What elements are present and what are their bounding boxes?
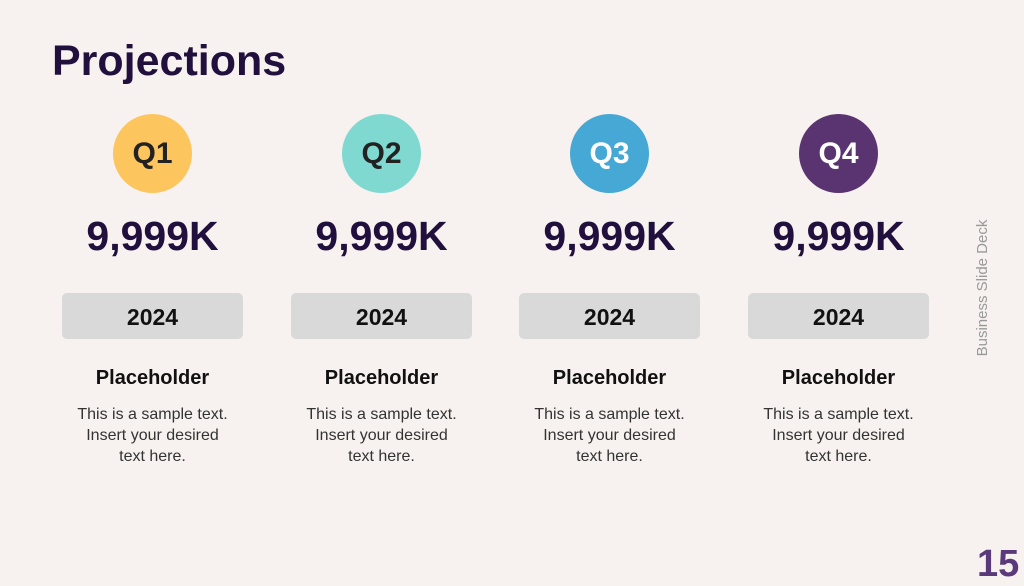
body text: Insert your desired [772, 427, 905, 444]
body text [763, 406, 914, 465]
icon: Q2 circle: Q2 [361, 137, 402, 170]
value: 9,999K [315, 213, 448, 259]
year box: 2024 [584, 304, 635, 330]
year box: 2024 [813, 304, 864, 330]
year box: 2024 [356, 304, 407, 330]
icon: Q4 circle [799, 114, 878, 193]
icon: Q1 circle [113, 114, 192, 193]
icon: Q3 circle [570, 114, 649, 193]
side label: Business Slide Deck [974, 220, 991, 356]
column: Q3 [519, 114, 700, 465]
heading: Placeholder [782, 367, 895, 389]
icon: Q3 circle: Q3 [589, 137, 630, 170]
icon: Q1 circle: Q1 [132, 137, 173, 170]
body text [306, 406, 457, 465]
body text: This is a sample text. [763, 406, 914, 423]
title: Projections [52, 37, 286, 85]
body text: This is a sample text. [306, 406, 457, 423]
body text [77, 406, 228, 465]
body text: This is a sample text. [534, 406, 685, 423]
year box [748, 293, 929, 339]
body text: Insert your desired [86, 427, 219, 444]
column: Q4 [748, 114, 929, 465]
column: Q1 [62, 114, 243, 465]
body text [534, 406, 685, 465]
body text: Insert your desired [315, 427, 448, 444]
value: 9,999K [86, 213, 219, 259]
body text: text here. [576, 448, 643, 465]
column: Q2 [291, 114, 472, 465]
heading: Placeholder [553, 367, 666, 389]
heading: Placeholder [325, 367, 438, 389]
icon: Q2 circle [342, 114, 421, 193]
year box: 2024 [127, 304, 178, 330]
year box [519, 293, 700, 339]
body text: This is a sample text. [77, 406, 228, 423]
icon: Q4 circle: Q4 [818, 137, 859, 170]
body text: text here. [348, 448, 415, 465]
body text: Insert your desired [543, 427, 676, 444]
value: 9,999K [772, 213, 905, 259]
value: 9,999K [543, 213, 676, 259]
year box [291, 293, 472, 339]
year box [62, 293, 243, 339]
page number: 15 [977, 543, 1019, 585]
body text: text here. [119, 448, 186, 465]
body text: text here. [805, 448, 872, 465]
heading: Placeholder [96, 367, 209, 389]
